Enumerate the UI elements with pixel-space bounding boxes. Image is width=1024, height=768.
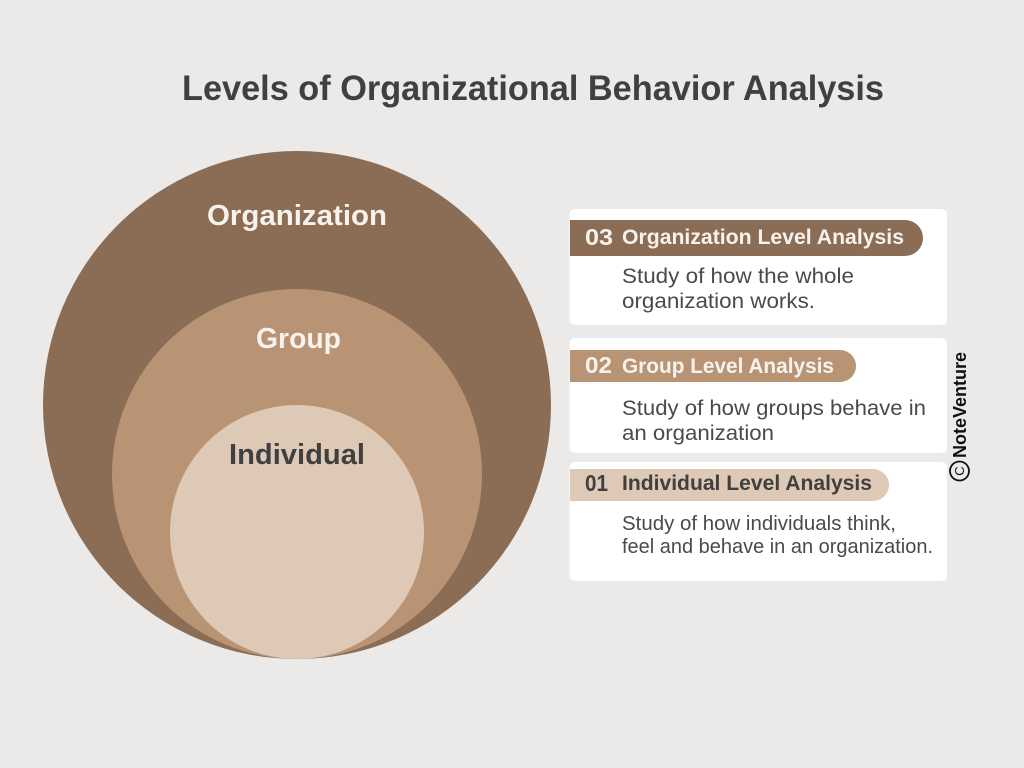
heading pill: 02 group: 02 [585,352,612,378]
description: group: Study of how groups behave in [622,396,926,420]
description: individual: Study of how individuals think, [622,512,896,535]
panel: group level analysis [570,338,947,453]
description: organization: organization works. [622,289,815,313]
title: Levels of Organizational Behavior Analysis [182,69,884,108]
circle: group: Group [256,323,341,355]
panel: organization level analysis [570,209,947,325]
heading pill: 03 organization: 03 [585,224,613,250]
description: group [622,396,926,445]
circle: organization: Organization [207,200,387,232]
heading pill: 03 organization: Organization Level Analysis [622,226,904,249]
watermark: NoteVenture: NoteVenture [950,352,970,458]
circle: individual: Individual [229,439,365,471]
description: organization [622,264,854,313]
description: group: an organization [622,421,774,445]
panel: individual level analysis [570,462,947,581]
heading pill: 02 group: Group Level Analysis [622,355,834,378]
circle: group [112,289,482,659]
heading pill: 01 individual: 01 [585,470,608,496]
watermark: NoteVenture: C [952,466,967,476]
circle: individual [170,405,424,659]
heading pill: 03 organization [570,220,923,256]
heading pill: 01 individual [570,469,889,501]
heading pill: 02 group [570,350,856,382]
description: individual [622,512,933,558]
heading pill: 01 individual: Individual Level Analysis [622,472,872,495]
description: individual: feel and behave in an organization. [622,535,933,558]
description: organization: Study of how the whole [622,264,854,288]
nested circles diagram [43,151,551,659]
